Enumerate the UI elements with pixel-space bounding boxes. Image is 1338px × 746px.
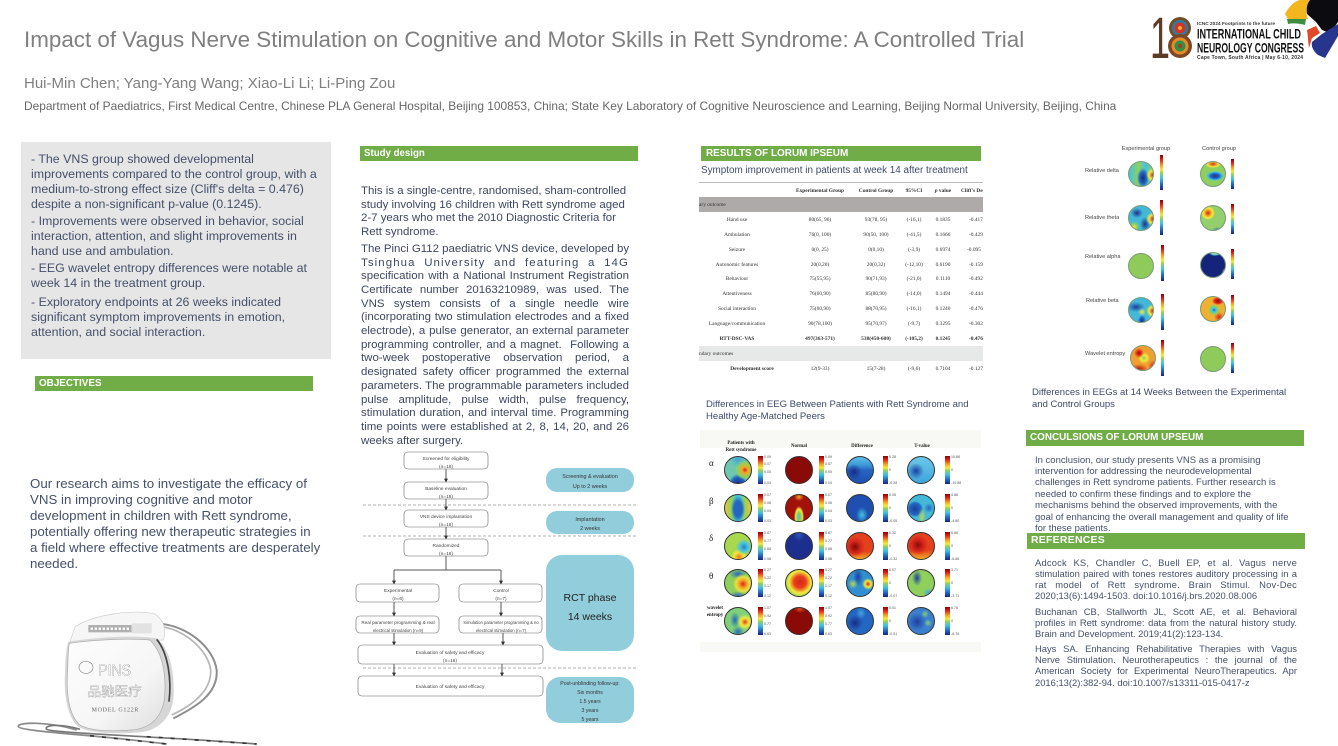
flowchart: trial design: Up to 2 weeks (573, 484, 607, 490)
chart: EEG topographic maps, patients vs peers: 1.07 (764, 606, 771, 610)
flowchart: trial design: (n=16) (439, 522, 453, 528)
chart: EEG maps, experimental vs control at week 14: Control group (1202, 146, 1236, 152)
chart: EEG topographic maps, patients vs peers: 0.77 (764, 539, 771, 543)
EEG comparison title: Healthy Age-Matched Peers (706, 410, 825, 422)
chart: EEG topographic maps, patients vs peers: 0.58 (825, 557, 832, 561)
chart: EEG topographic maps, patients vs peers: 0.09 (764, 455, 771, 459)
chart: EEG topographic maps, patients vs peers: 0.06 (764, 501, 771, 505)
study design text: Rett syndrome. weeks after surgery. (361, 226, 463, 447)
study design text: programming controller, and a magnet. Following a (361, 339, 629, 351)
study design text: stimulation duration, and interval time. Programming (361, 407, 629, 419)
chart: EEG topographic maps, patients vs peers: 0.03 (764, 519, 771, 523)
chart: EEG topographic maps, patients vs peers: 0.07 (825, 493, 832, 497)
results table: 0.1240 (936, 306, 950, 312)
flowchart: trial design: 2 weeks (580, 526, 600, 532)
flowchart: trial design: Evaluation of safety and efficacy (416, 650, 485, 656)
results table: Social interaction (718, 306, 756, 312)
results table: 497(363-571) (805, 336, 835, 342)
flowchart: trial design: 1.5 years (579, 699, 601, 705)
flowchart: trial design: Experimental (384, 588, 412, 594)
chart: EEG topographic maps, patients vs peers: 0.28 (889, 455, 896, 459)
chart: EEG topographic maps, patients vs peers: 0.05 (825, 470, 832, 474)
chart: EEG topographic maps, patients vs peers: 4.88 (951, 493, 958, 497)
panel: key findings: - The VNS group showed developmental (31, 152, 254, 166)
chart: EEG topographic maps, patients vs peers: -0.28 (889, 481, 897, 485)
objectives text: needed. (30, 556, 78, 571)
chart: EEG topographic maps, patients vs peers: 0 (951, 581, 953, 585)
results table: -0.302 (969, 321, 983, 327)
chart: EEG topographic maps, patients vs peers: 0.05 (764, 470, 771, 474)
results table: Experimental Group (796, 188, 844, 194)
chart: EEG topographic maps, patients vs peers: 0.12 (825, 594, 832, 598)
chart: EEG topographic maps, patients vs peers: 0.04 (825, 509, 832, 513)
chart: EEG topographic maps, patients vs peers: Patients with (727, 441, 755, 446)
panel: key findings: interaction, attention, and slight improvements in (31, 228, 297, 242)
results table: 20(0,32) (867, 262, 885, 268)
chart: EEG topographic maps, patients vs peers: 0.04 (764, 481, 771, 485)
flowchart: trial design: 3 years (581, 708, 599, 714)
results table: (-12,10) (905, 262, 923, 268)
panel: key findings: despite a non-significant p-value (0.1245). - Improvements were observed in behavior, social (31, 196, 304, 228)
references list: profiles in Rett syndrome: data from the natural history study. (1035, 617, 1297, 628)
chart: EEG topographic maps, patients vs peers: Rett syndrome (726, 448, 756, 453)
results table: 93(78, 95) (865, 217, 887, 223)
results table: 85(80,90) (865, 291, 887, 297)
chart: EEG topographic maps, patients vs peers: 0 (951, 619, 953, 623)
panel: key findings: week 14 in the treatment group. - Exploratory endpoints at 26 weeks indicated (31, 276, 281, 308)
results table: 0.1245 (936, 336, 950, 342)
heading: references (1027, 533, 1305, 549)
chart: EEG topographic maps, patients vs peers: 0.27 (764, 568, 771, 572)
illustration: implanted VNS device: MODEL G122R (92, 708, 138, 714)
panel: key findings: hand use and ambulation. - EEG wavelet entropy differences were notable at (31, 244, 307, 274)
EEG comparison title: Differences in EEG Between Patients with Rett Syndrome and (706, 399, 968, 410)
row: relative alpha (1085, 245, 1234, 281)
results table: 0(0, 25) (811, 246, 829, 252)
figure caption: Differences in EEGs at 14 Weeks Between the Experimental (1032, 387, 1286, 398)
results table: (-16,1) (907, 306, 921, 312)
chart: EEG topographic maps, patients vs peers: -6.66 (951, 557, 959, 561)
objectives text (30, 476, 320, 571)
flowchart: trial design: 5 years (581, 717, 599, 723)
chart: EEG maps, experimental vs control at week 14: Relative alpha (1085, 254, 1120, 260)
conclusions text: intervention for addressing the neurodevelopmental (1035, 466, 1252, 477)
row: beta (709, 493, 960, 523)
chart: EEG topographic maps, patients vs peers: 10.88 (951, 455, 960, 459)
results table: Autonomic features (716, 262, 758, 268)
results table: 80(65, 96) (809, 217, 831, 223)
chart: EEG topographic maps, patients vs peers: -0.51 (889, 632, 897, 636)
references list: stimulation paired with tones restores auditory processing in a (1035, 568, 1297, 579)
results table: 75(55,95) (809, 276, 831, 282)
results table (699, 182, 983, 372)
flowchart: trial design: (n=16) (443, 658, 457, 664)
affiliations: Department of Paediatrics, First Medical Centre, Chinese PLA General Hospital, Beijing 100853, China; State Key Laboratory of Cognitive Neuroscience and Learning, Beijing Normal University, Beijing, China (24, 99, 1116, 113)
chart: EEG topographic maps, patients vs peers: 0.17 (825, 584, 832, 588)
flowchart: trial design: electrical stimulation (n=9) (373, 628, 424, 633)
study design text: 2-7 years who met the 2010 Diagnostic Criteria for (361, 212, 616, 224)
chart: EEG topographic maps, patients vs peers: -0.32 (889, 557, 897, 561)
heading: references: REFERENCES (1031, 535, 1105, 546)
references list: 2020;13(6):1494-1503. doi:10.1016/j.brs.2020.08.006 Brain and Development. 2019;41(2):123-134. 2016;13(2):382-94. doi:10.1007/s13311-015-0417-z (1035, 590, 1257, 688)
logo: International Child Neurology Congress: ICNC 2024 Footprints to the future (1197, 21, 1275, 26)
results table: Hand use (727, 217, 747, 223)
panel: key findings: improvements compared to the control group, with a (31, 166, 317, 180)
chart: EEG topographic maps, patients vs peers: -4.80 (951, 519, 959, 523)
results table: -0.476 (969, 336, 983, 342)
results table: Seizure (729, 246, 745, 252)
flowchart: trial design: Randomized (433, 543, 460, 549)
conclusions text: mechanisms behind the observed improvements, with the (1035, 500, 1277, 511)
chart: EEG maps, experimental vs control at week 14: Experimental group (1122, 146, 1170, 152)
conclusions text (1035, 454, 1289, 534)
heading: results (701, 146, 981, 161)
chart: EEG topographic maps, patients vs peers: 0.87 (825, 531, 832, 535)
study design text: two-week postoperative observation period, a (361, 352, 629, 364)
results table: (-16,1) (907, 217, 921, 223)
results table: 0.3295 (936, 321, 950, 327)
chart: EEG topographic maps, patients vs peers: T-value (914, 444, 930, 449)
row: wavelet entropy (706, 606, 960, 636)
chart: EEG topographic maps, patients vs peers: 0 (889, 619, 891, 623)
chart: EEG topographic maps, patients vs peers: 0.06 (825, 501, 832, 505)
EEG comparison title (706, 399, 968, 422)
results table: Development score (730, 366, 774, 372)
references list: rat model of Rett syndrome. Brain Stimul. Nov-Dec (1035, 579, 1297, 590)
chart: EEG topographic maps, patients vs peers: 0.92 (764, 614, 771, 618)
chart: EEG topographic maps, patients vs peers: 0.63 (764, 632, 771, 636)
chart: EEG topographic maps, patients vs peers: -6.76 (951, 632, 959, 636)
panel: key findings: significant symptom improvements in emotion, (31, 310, 285, 324)
conclusions text: for these patients. (1035, 523, 1111, 534)
chart: EEG topographic maps, patients vs peers: -0.07 (889, 594, 897, 598)
chart: EEG topographic maps, patients vs peers: 0.51 (889, 606, 896, 610)
heading: objectives (35, 376, 313, 391)
chart: EEG topographic maps, patients vs peers: Normal (791, 444, 807, 449)
chart: EEG topographic maps, patients vs peers: 0.58 (764, 557, 771, 561)
results table: p value (935, 188, 951, 194)
results table: -0.159 (969, 262, 983, 268)
heading: conclusions: CONCULSIONS OF LORUM UPSEUM (1030, 432, 1203, 443)
row: alpha (709, 455, 962, 485)
chart: EEG topographic maps, patients vs peers: 0.77 (825, 622, 832, 626)
results table: RTT-DSC-VAS (720, 336, 754, 342)
flowchart: trial design: (n=16) (439, 494, 453, 500)
study design text: designated safety officer programmed the external (361, 366, 629, 378)
references list: Hays SA. Enhancing Rehabilitative Therapies with Vagus (1035, 643, 1297, 654)
results table: 0.1666 (936, 232, 950, 238)
heading: conclusions (1026, 430, 1304, 446)
chart: EEG maps, experimental vs control at week 14: Wavelet entropy (1085, 351, 1125, 357)
results table: (-9,7) (908, 321, 920, 327)
chart: EEG topographic maps, patients vs peers: β (709, 496, 714, 506)
flowchart: trial design: (n=7) (495, 596, 507, 602)
results table: 0.1835 (936, 217, 950, 223)
table title: Symptom improvement in patients at week 14 after treatment (701, 165, 968, 176)
row: theta (709, 568, 960, 598)
chart: EEG topographic maps, patients vs peers: 0.04 (764, 509, 771, 513)
study design text: electrode), a pulse generator, an external parameter (361, 325, 629, 337)
flowchart: trial design: RCT phase (564, 592, 617, 604)
study design text: parameters. The programmable parameters included (361, 380, 629, 392)
logo: International Child Neurology Congress: Cape Town, South Africa | May 6-10, 2024 (1197, 55, 1303, 61)
chart: EEG topographic maps, patients vs peers: -0.05 (889, 519, 897, 523)
chart: EEG topographic maps, patients vs peers: δ (709, 533, 713, 543)
flowchart: trial design: (n=16) (439, 551, 453, 557)
heading: study design (360, 146, 638, 161)
chart: EEG topographic maps, patients vs peers: 0.12 (764, 594, 771, 598)
chart: EEG topographic maps, patients vs peers: θ (709, 571, 713, 581)
flowchart: trial design: Post-unblinding follow-up: (560, 681, 620, 687)
flowchart: trial design (356, 452, 636, 723)
row: relative delta (1085, 155, 1234, 190)
flowchart: trial design: Baseline evaluation (425, 486, 467, 492)
row: relative beta (1086, 294, 1234, 330)
chart: EEG topographic maps, patients vs peers: 0 (951, 544, 953, 548)
results table: Control Group (859, 188, 893, 194)
chart: EEG topographic maps, patients vs peers: 0.68 (825, 547, 832, 551)
results table: -0.417 (969, 217, 983, 223)
study design text: VNS system consists of a single needle wire (361, 298, 629, 310)
results table: 0.1494 (936, 291, 950, 297)
panel: key findings: medium-to-strong effect size (Cliff's delta = 0.476) (31, 182, 304, 196)
results table: 95%CI (906, 188, 922, 194)
chart: EEG topographic maps, patients vs peers: entropy (707, 613, 723, 618)
results table: -0.444 (969, 291, 983, 297)
flowchart: trial design: electrical stimulation (n=7) (476, 628, 527, 633)
chart: EEG topographic maps, patients vs peers: Difference (851, 444, 873, 449)
conclusions text: needed to confirm these findings and to explore the (1035, 489, 1251, 500)
chart: EEG topographic maps, patients vs peers: 0.77 (825, 539, 832, 543)
results table: 15(7-28) (867, 366, 885, 372)
panel: key findings (21, 142, 331, 359)
authors: Hui-Min Chen; Yang-Yang Wang; Xiao-Li Li; Li-Ping Zou (24, 75, 395, 92)
illustration: implanted VNS device (17, 612, 257, 745)
chart: EEG topographic maps, patients vs peers: 0.22 (825, 576, 832, 580)
results table: 90(71,93) (865, 276, 887, 282)
chart: EEG topographic maps, patients vs peers: 0.63 (825, 632, 832, 636)
row: wavelet entropy (1085, 340, 1234, 376)
chart: EEG topographic maps, patients vs peers: 0.17 (764, 584, 771, 588)
results table: -0.476 (969, 306, 983, 312)
flowchart: trial design: (n=6) (392, 596, 404, 602)
chart: EEG topographic maps, patients vs peers: -10.88 (951, 481, 961, 485)
flowchart: trial design: Screening & evaluation (562, 474, 618, 480)
study design text: Certificate number 20163210989, was used. The (361, 284, 629, 296)
results table: ary outcome (699, 202, 726, 208)
heading: objectives: OBJECTIVES (39, 378, 102, 389)
results table: 12(9-33) (811, 366, 829, 372)
chart: EEG topographic maps, patients vs peers: wavelet (707, 606, 723, 611)
chart: EEG topographic maps, patients vs peers: 0.32 (889, 531, 896, 535)
results table: 76(0, 100) (809, 232, 831, 238)
figure caption (1032, 387, 1286, 410)
chart: EEG topographic maps, patients vs peers: 0.04 (825, 481, 832, 485)
chart: EEG topographic maps, patients vs peers: 0.87 (764, 531, 771, 535)
results table: 90(78,100) (808, 321, 832, 327)
chart: EEG topographic maps, patients vs peers: 0.07 (764, 462, 771, 466)
results table: Attentiveness (722, 291, 752, 297)
chart: EEG topographic maps, patients vs peers: 0.92 (825, 614, 832, 618)
flowchart: trial design: VNS device implantation (420, 514, 472, 520)
results table: Language/communication (709, 321, 765, 327)
heading: study design: Study design (364, 148, 425, 159)
study design text: This is a single-centre, randomised, sham-controlled (361, 185, 626, 197)
panel: key findings: attention, and social interaction. (31, 324, 205, 338)
study design text: study involving 16 children with Rett syndrome aged (361, 199, 625, 211)
objectives text: development in children with Rett syndrome, (30, 508, 292, 523)
chart: EEG topographic maps, patients vs peers: 0 (889, 468, 891, 472)
objectives text: a field where effective treatments are desperately (30, 540, 320, 555)
flowchart: trial design: 14 weeks (568, 611, 612, 623)
references list (1035, 556, 1297, 688)
objectives text: Our research aims to investigate the efficacy of (30, 476, 307, 491)
results table: 0.7104 (936, 366, 950, 372)
chart: EEG topographic maps, patients vs peers: 0.68 (764, 547, 771, 551)
illustration: implanted VNS device: 品驰医疗 (88, 681, 142, 700)
flowchart: trial design: (n=16) (439, 464, 453, 470)
results table: 0.6190 (936, 262, 950, 268)
results table: 0.1110 (936, 276, 950, 282)
row: relative theta (1085, 200, 1234, 235)
results table: 0.6974 (936, 246, 950, 252)
flowchart: trial design: Control (493, 588, 509, 594)
results table: (-21,0) (907, 276, 921, 282)
chart: EEG topographic maps, patients vs peers: 6.66 (951, 531, 958, 535)
results table: 95(70,97) (865, 321, 887, 327)
results table: (-9,6) (908, 366, 920, 372)
results table: -0.127 (969, 366, 983, 372)
chart: EEG topographic maps, patients vs peers: -3.71 (951, 594, 959, 598)
flowchart: trial design: Real parameter programming & real (361, 620, 435, 625)
study design text: specification with a National Instrument Registration (361, 270, 629, 282)
chart: EEG topographic maps, patients vs peers: 0.09 (825, 455, 832, 459)
results table: -0.492 (969, 276, 983, 282)
chart: EEG topographic maps, patients vs peers: 0.22 (764, 576, 771, 580)
results table: Ambulation (724, 232, 750, 238)
chart: EEG topographic maps, patients vs peers: 0.77 (764, 622, 771, 626)
results table: ndary outcomes (699, 351, 733, 357)
chart: EEG topographic maps, patients vs peers: 0 (889, 581, 891, 585)
chart: EEG topographic maps, patients vs peers: 0.05 (889, 493, 896, 497)
flowchart: trial design: Six months (577, 690, 603, 696)
results table: -0.095 (967, 246, 981, 252)
study design text: Tsinghua University and featuring a 14G (361, 257, 629, 269)
results table: 75(60,90) (809, 306, 831, 312)
results table: (-41,5) (907, 232, 921, 238)
chart: EEG maps, experimental vs control at week 14: Relative beta (1086, 298, 1119, 304)
results table: 90(50, 100) (863, 232, 889, 238)
chart: EEG topographic maps, patients vs peers: 0.27 (825, 568, 832, 572)
flowchart: trial design: Implantation (575, 517, 605, 523)
chart: EEG maps, experimental vs control at week 14 (1085, 146, 1236, 376)
results table: 538(450-600) (861, 336, 891, 342)
figure caption: and Control Groups (1032, 399, 1115, 410)
references list: Adcock KS, Chandler C, Buell EP, et al. Vagus nerve (1035, 556, 1297, 568)
chart: EEG topographic maps, patients vs peers (700, 430, 981, 652)
chart: EEG topographic maps, patients vs peers: 0 (951, 506, 953, 510)
conclusions text: challenges in Rett syndrome patients. Further research is (1035, 477, 1276, 488)
row: delta (709, 531, 960, 561)
flowchart: trial design: Evaluation of safety and efficacy (416, 684, 485, 690)
results table: (-105,2) (905, 336, 923, 342)
logo: International Child Neurology Congress (1150, 0, 1338, 66)
objectives text: VNS in improving cognitive and motor (30, 492, 252, 507)
conclusions text: In conclusion, our study presents VNS as a promising (1035, 454, 1260, 466)
flowchart: trial design: Screened for eligibility (423, 456, 470, 462)
chart: EEG maps, experimental vs control at week 14: Relative delta (1085, 168, 1119, 174)
conclusions text: goal of enhancing the overall management and quality of life (1035, 512, 1289, 523)
title: Impact of Vagus Nerve Stimulation on Cognitive and Motor Skills in Rett Syndrome: A Controlled Trial (24, 27, 1024, 52)
results table: (-3,9) (908, 246, 920, 252)
chart: EEG topographic maps, patients vs peers: 0.07 (764, 493, 771, 497)
references list: Buchanan CB, Stallworth JL, Scott AE, et al. Behavioral (1035, 606, 1297, 617)
study design text: time points were established at 2, 8, 14, 20, and 26 (361, 421, 629, 433)
chart: EEG topographic maps, patients vs peers: 0 (889, 544, 891, 548)
chart: EEG topographic maps, patients vs peers: 1.07 (825, 606, 832, 610)
results table: (-14,0) (907, 291, 921, 297)
results table: -0.429 (969, 232, 983, 238)
chart: EEG topographic maps, patients vs peers: 3.71 (951, 568, 958, 572)
objectives text: potentially offering new therapeutic strategies in (30, 524, 311, 539)
chart: EEG topographic maps, patients vs peers: 0 (889, 506, 891, 510)
results table: 76(60,90) (809, 291, 831, 297)
chart: EEG topographic maps, patients vs peers: 0.07 (889, 568, 896, 572)
chart: EEG topographic maps, patients vs peers: 0.07 (825, 462, 832, 466)
results table: 20(0,20) (811, 262, 829, 268)
chart: EEG topographic maps, patients vs peers: 0 (951, 468, 953, 472)
chart: EEG topographic maps, patients vs peers: α (709, 458, 714, 468)
references list: Nerve Stimulation. Neurotherapeutics : the journal of the (1035, 654, 1297, 665)
study design text: The Pinci G112 paediatric VNS device, developed by (361, 243, 629, 255)
references list: American Society for Experimental NeuroTherapeutics. Apr (1035, 665, 1297, 676)
chart: EEG topographic maps, patients vs peers: 6.76 (951, 606, 958, 610)
illustration: implanted VNS device: PINS (98, 662, 131, 679)
flowchart: trial design: Simulation parameter programming & no (463, 620, 539, 625)
chart: EEG maps, experimental vs control at week 14: Relative theta (1085, 215, 1119, 221)
study design text (361, 185, 629, 447)
study design text: pulse amplitude, pulse width, pulse frequency, (361, 394, 629, 406)
chart: EEG topographic maps, patients vs peers: 0.03 (825, 519, 832, 523)
study design text: (incorporating two stimulation electrodes and a fixed (361, 311, 629, 323)
results table: 88(70,95) (865, 306, 887, 312)
results table: 0(0,10) (868, 246, 884, 252)
results table: Behaviour (726, 276, 748, 282)
heading: results: RESULTS OF LORUM IPSEUM (706, 148, 848, 159)
